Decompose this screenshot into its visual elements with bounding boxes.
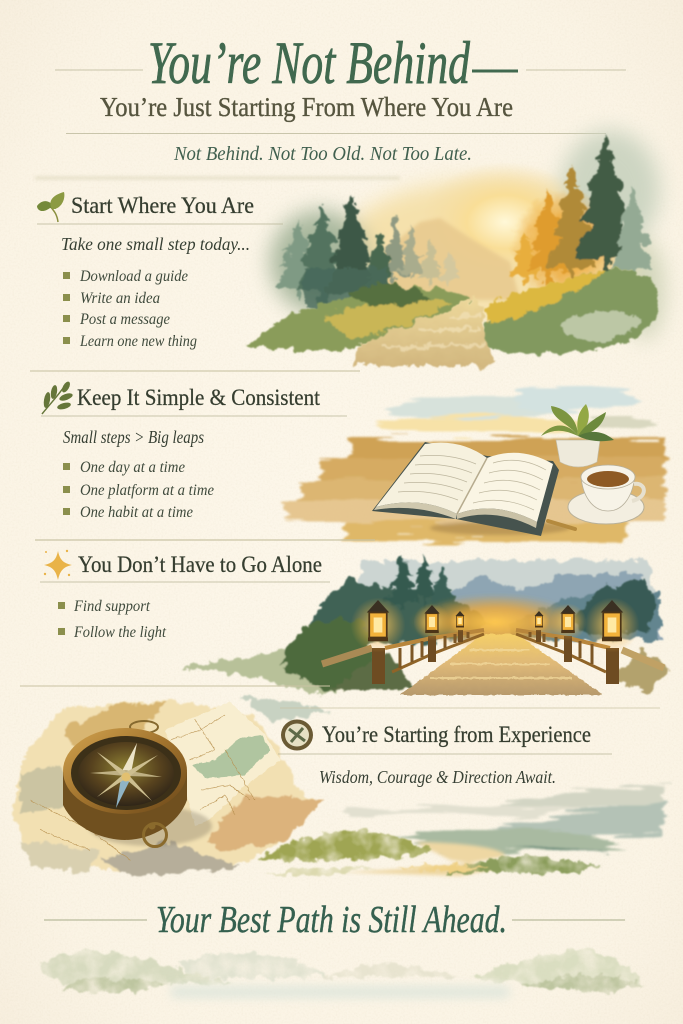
illustration: lake landscape	[258, 786, 665, 876]
bullet list: Post a message	[79, 311, 170, 328]
bullet list: Learn one new thing	[79, 333, 197, 350]
map washes	[12, 696, 330, 876]
bullet list	[63, 268, 197, 350]
bridge railings	[322, 630, 664, 672]
wooden table	[285, 438, 665, 540]
illustration: forest path at sunrise	[245, 130, 665, 366]
sky wash	[375, 385, 655, 432]
map sheet	[30, 702, 280, 860]
bullet list	[58, 598, 166, 641]
compass	[63, 721, 212, 846]
plant pot	[541, 404, 614, 467]
heading: You’re Starting from Experience	[322, 722, 591, 747]
lead text: Take one small step today...	[61, 234, 250, 254]
section 4: You're Starting from Experience	[278, 708, 660, 787]
soft background washes	[270, 130, 665, 340]
icon: compass badge	[281, 720, 313, 750]
body text: Wisdom, Courage & Direction Await.	[319, 767, 556, 787]
bullet list	[63, 459, 214, 521]
glow	[410, 594, 580, 650]
illustration: bottom hills and lake	[38, 950, 645, 998]
section 3: You Don't Have to Go Alone	[40, 550, 330, 641]
illustration: open book and coffee on table	[285, 385, 665, 540]
bullet list: Download a guide	[79, 268, 188, 285]
bullet list: Follow the light	[73, 624, 166, 641]
lantern posts	[372, 630, 619, 684]
lanterns	[350, 598, 640, 652]
title: You're Not Behind: You’re Not Behind	[148, 30, 471, 96]
heading: Start Where You Are	[71, 193, 254, 218]
book	[372, 442, 559, 536]
left pine trees	[275, 195, 461, 310]
forest	[180, 555, 668, 695]
bridge deck	[400, 634, 603, 695]
coffee cup and saucer	[568, 465, 644, 524]
lead text: Small steps > Big leaps	[63, 427, 204, 447]
heading: Keep It Simple & Consistent	[77, 385, 321, 410]
tagline: Not Behind. Not Too Old. Not Too Late.	[173, 143, 472, 165]
meadow grass	[245, 270, 659, 353]
subtitle: You’re Just Starting From Where You Are	[100, 92, 513, 122]
illustration: lantern-lit bridge	[180, 555, 668, 695]
section 2: Keep It Simple & Consistent	[41, 380, 347, 521]
shrubs	[258, 831, 602, 875]
bullet list: One platform at a time	[80, 482, 214, 499]
right golden trees	[509, 135, 654, 300]
pen	[548, 521, 575, 529]
bullet list: One habit at a time	[80, 504, 193, 521]
section 1: Start Where You Are	[37, 192, 283, 350]
icon: leaf	[37, 192, 64, 222]
river	[340, 842, 505, 876]
heading: You Don’t Have to Go Alone	[78, 552, 322, 577]
icon: sprig	[42, 380, 74, 414]
icon: star	[44, 550, 72, 580]
illustration: map with compass	[12, 696, 330, 876]
mountain	[385, 218, 520, 300]
bullet list: Find support	[73, 598, 150, 615]
compass needles	[90, 743, 162, 808]
bullet list: One day at a time	[80, 459, 185, 476]
bullet list: Write an idea	[80, 290, 160, 307]
closing line: Your Best Path is Still Ahead: Your Best Path is Still Ahead.	[156, 899, 507, 941]
dirt path	[352, 295, 493, 366]
sky and mountains	[360, 560, 665, 640]
